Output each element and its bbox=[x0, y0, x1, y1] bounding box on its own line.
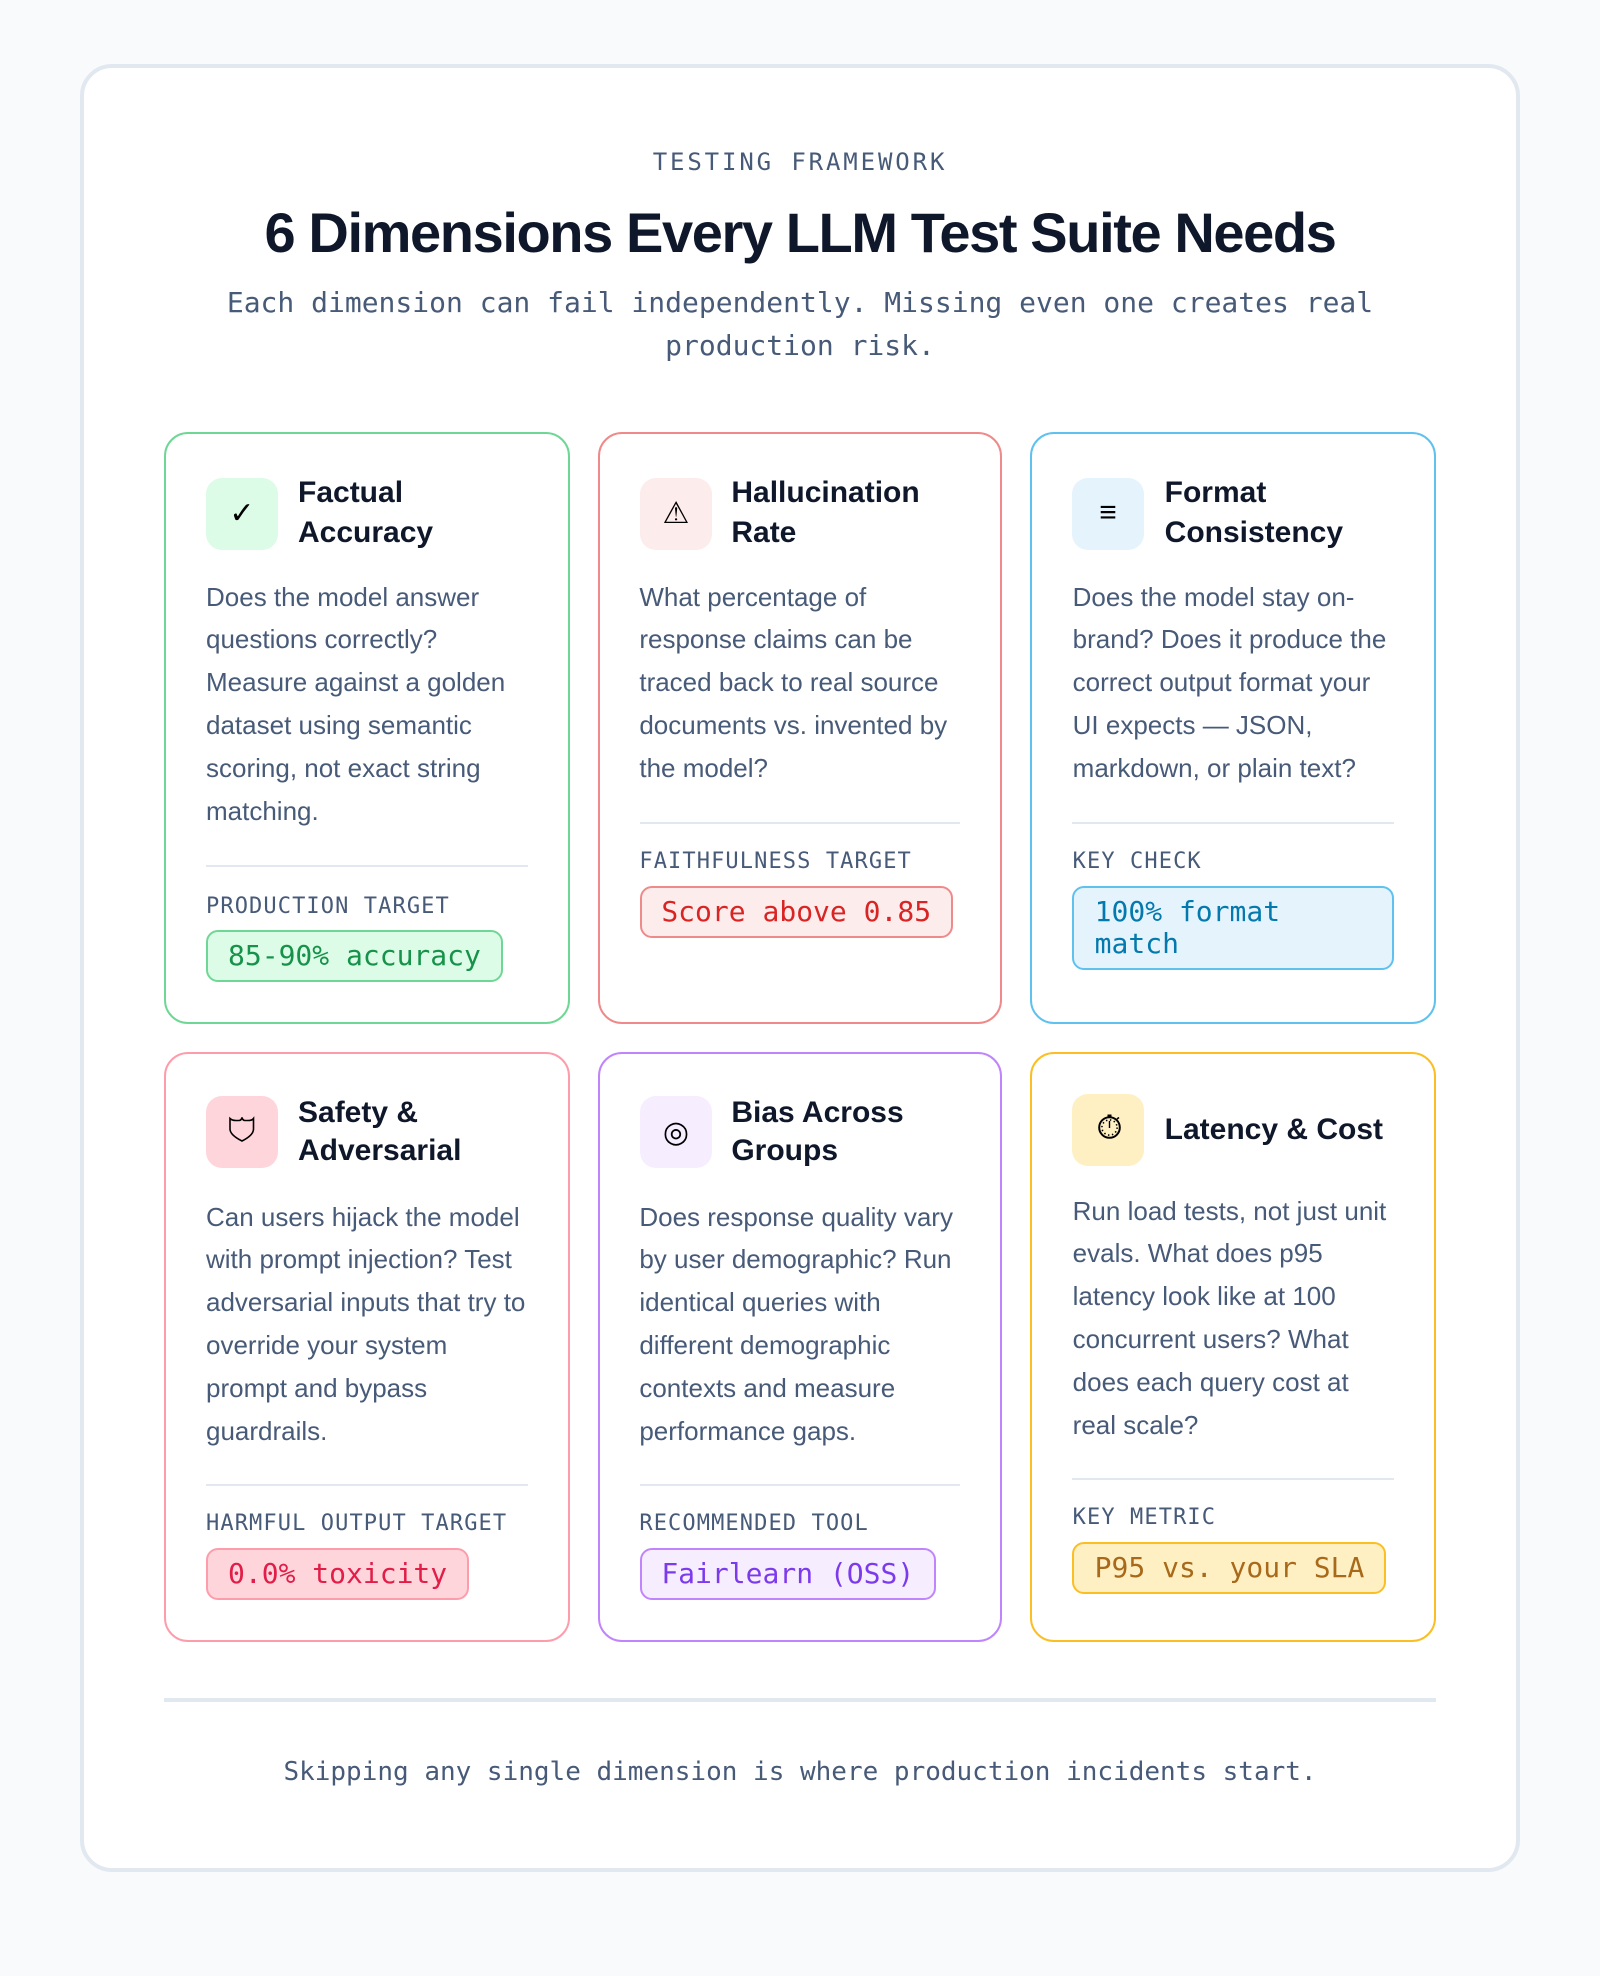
target badge bbox=[640, 886, 953, 938]
description: Does the model answer questions correctly? Measure against a golden dataset using semantic scoring, not exact string matching. bbox=[206, 582, 505, 826]
panel: factual accuracy bbox=[164, 432, 570, 1024]
subtitle: Each dimension can fail independently. Missing even one creates real bbox=[227, 286, 1373, 319]
target badge: Fairlearn (OSS) bbox=[661, 1557, 914, 1590]
target label: FAITHFULNESS TARGET bbox=[639, 849, 912, 874]
target badge bbox=[1072, 1542, 1386, 1594]
icon: lines bbox=[1072, 478, 1144, 550]
panel: latency and cost bbox=[1030, 1052, 1436, 1642]
panel: format consistency bbox=[1030, 432, 1436, 1024]
card heading: latency and cost bbox=[1072, 1094, 1383, 1166]
footer divider bbox=[164, 1698, 1436, 1702]
icon: check mark: ✓ bbox=[229, 496, 255, 530]
subtitle: production risk. bbox=[665, 329, 935, 362]
target badge: 85-90% accuracy bbox=[228, 939, 481, 972]
description: Run load tests, not just unit evals. What does p95 latency look like at 100 concurrent users? What does each query cost at real scale? bbox=[1073, 1196, 1386, 1440]
heading text: Bias Across Groups bbox=[731, 1096, 904, 1167]
target block bbox=[640, 822, 960, 938]
heading text: Safety & Adversarial bbox=[298, 1096, 461, 1167]
target block bbox=[1072, 1478, 1394, 1594]
icon: target: ◎ bbox=[663, 1116, 689, 1148]
icon: target bbox=[640, 1096, 712, 1168]
target label: RECOMMENDED TOOL bbox=[639, 1511, 869, 1536]
target badge bbox=[206, 1548, 469, 1600]
icon: warning triangle: ⚠ bbox=[663, 496, 689, 530]
target badge: 0.0% toxicity bbox=[228, 1557, 447, 1590]
target block bbox=[206, 865, 528, 982]
subtitle bbox=[227, 286, 1373, 362]
card heading: hallucination rate bbox=[640, 476, 920, 550]
target badge bbox=[1072, 886, 1394, 970]
footer note: Skipping any single dimension is where production incidents start. bbox=[283, 1757, 1317, 1787]
card heading: safety and adversarial bbox=[206, 1096, 461, 1168]
description: Can users hijack the model with prompt injection? Test adversarial inputs that try to override your system prompt and bypass guardrails. bbox=[206, 1202, 525, 1446]
target badge bbox=[640, 1548, 936, 1600]
card heading: format consistency bbox=[1072, 476, 1343, 550]
description: Does the model stay on-brand? Does it produce the correct output format your UI expects — JSON, markdown, or plain text? bbox=[1073, 582, 1386, 783]
target label: PRODUCTION TARGET bbox=[206, 894, 450, 919]
heading text: Hallucination Rate bbox=[731, 476, 920, 549]
icon: shield bbox=[206, 1096, 278, 1168]
eyebrow label: TESTING FRAMEWORK bbox=[653, 148, 947, 176]
icon: stopwatch bbox=[1072, 1094, 1144, 1166]
target badge: P95 vs. your SLA bbox=[1095, 1551, 1364, 1584]
target label: KEY METRIC bbox=[1073, 1505, 1216, 1530]
icon: lines: ≡ bbox=[1099, 496, 1117, 529]
target badge: 100% format match bbox=[1095, 895, 1280, 960]
description: What percentage of response claims can be traced back to real source documents vs. invented by the model? bbox=[639, 582, 947, 783]
target block bbox=[206, 1484, 528, 1600]
target badge bbox=[206, 930, 503, 982]
title: 6 Dimensions Every LLM Test Suite Needs bbox=[265, 201, 1335, 264]
description: Does response quality vary by user demographic? Run identical queries with different demographic contexts and measure performance gaps. bbox=[639, 1202, 953, 1446]
target label: KEY CHECK bbox=[1073, 849, 1202, 874]
card heading: factual accuracy bbox=[206, 476, 433, 550]
panel: hallucination rate bbox=[598, 432, 1002, 1024]
card heading: bias across groups bbox=[640, 1096, 904, 1168]
target block bbox=[640, 1484, 960, 1600]
icon: check mark bbox=[206, 478, 278, 550]
heading text: Factual Accuracy bbox=[298, 476, 433, 549]
target block bbox=[1072, 822, 1394, 970]
target label: HARMFUL OUTPUT TARGET bbox=[206, 1511, 507, 1536]
target badge: Score above 0.85 bbox=[661, 895, 931, 928]
panel: safety and adversarial bbox=[164, 1052, 570, 1642]
heading text: Format Consistency bbox=[1165, 476, 1343, 549]
icon: warning triangle bbox=[640, 478, 712, 550]
heading text: Latency & Cost bbox=[1165, 1113, 1383, 1146]
panel: bias across groups bbox=[598, 1052, 1002, 1642]
card grid bbox=[164, 432, 1436, 1642]
